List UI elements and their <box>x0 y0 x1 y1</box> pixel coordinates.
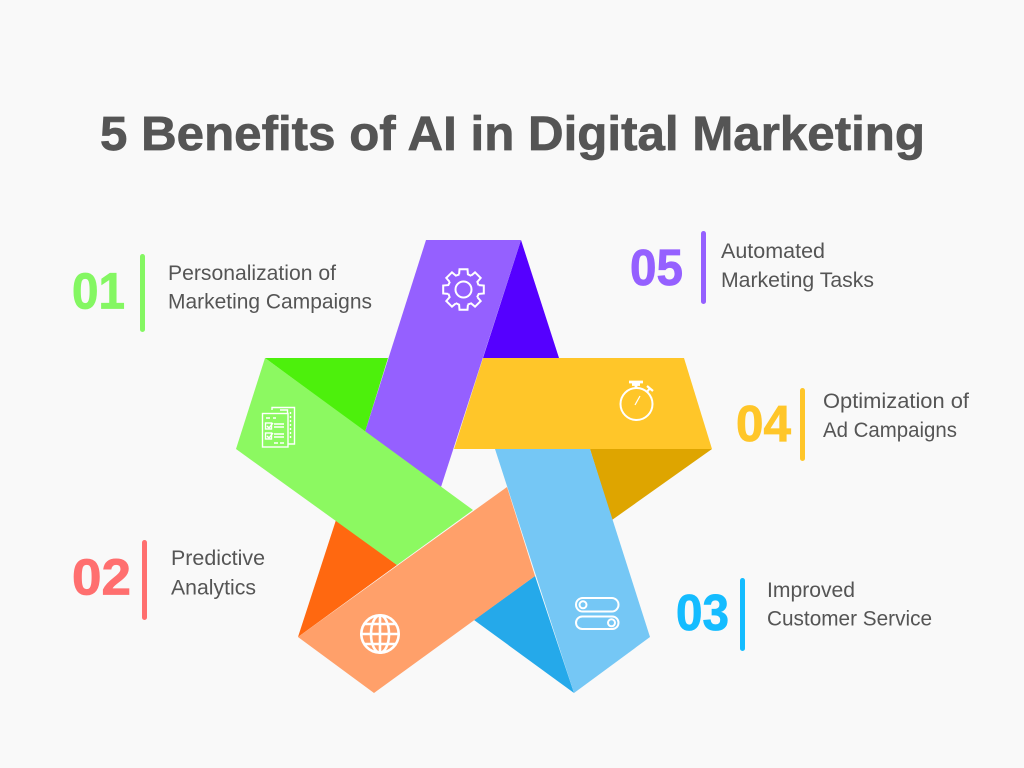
benefit 05: Marketing Tasks <box>721 269 874 292</box>
benefit 05 <box>630 231 874 304</box>
title: 5 Benefits of AI in Digital Marketing <box>100 108 925 161</box>
benefit 01: 01 <box>72 262 125 320</box>
icon: gear <box>443 269 484 310</box>
band: blue <box>495 449 650 693</box>
benefit 02: Predictive <box>171 547 265 570</box>
benefit 02: 02 <box>72 548 131 606</box>
benefit 04: Ad Campaigns <box>823 419 957 442</box>
fold: dark green <box>265 358 388 432</box>
star diagram <box>236 240 712 693</box>
benefit 02: Analytics <box>171 576 256 600</box>
band: green <box>236 358 473 565</box>
benefit 03 <box>676 578 932 651</box>
benefit 04 <box>736 388 969 461</box>
benefit 03: 03 <box>676 584 729 641</box>
benefit 02 <box>72 540 265 620</box>
fold: dark purple <box>483 240 559 358</box>
benefit 03: Improved <box>767 579 855 602</box>
benefit 01 <box>72 254 372 332</box>
benefit 01: Marketing Campaigns <box>168 290 372 314</box>
band: yellow <box>454 358 712 449</box>
benefit 04: Optimization of <box>823 390 969 413</box>
benefit 04: 04 <box>736 395 792 452</box>
benefit 05: 05 <box>630 239 683 296</box>
band: purple <box>365 240 521 487</box>
icon: globe <box>361 615 399 653</box>
fold: dark yellow <box>590 449 712 520</box>
fold: dark orange <box>298 520 397 637</box>
benefit 01: Personalization of <box>168 262 336 285</box>
icon: stopwatch <box>620 382 653 420</box>
icon: toggles <box>576 598 618 629</box>
benefit 05: Automated <box>721 240 825 263</box>
band: orange <box>298 487 535 693</box>
fold: dark blue <box>474 576 574 693</box>
icon: documents <box>262 408 294 447</box>
benefit 03: Customer Service <box>767 608 932 630</box>
